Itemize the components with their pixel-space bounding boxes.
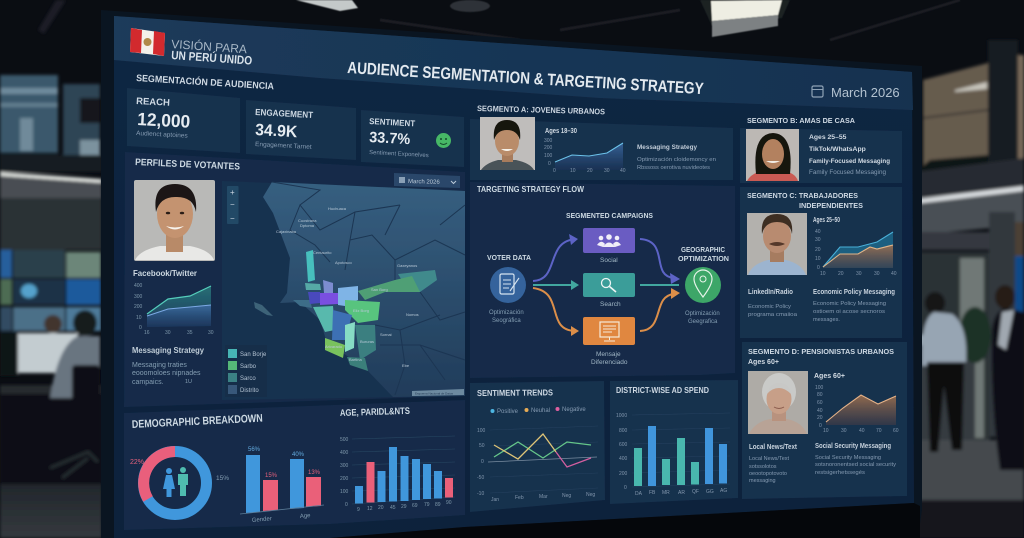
bar chart: [616, 413, 730, 497]
card: engagement: Engagement Tarnet: [255, 141, 312, 151]
card: mensaje diferenciado: Mensaje: [596, 351, 621, 358]
choropleth map: districts of Peru: Cajaxinaba: [276, 229, 297, 234]
chart: segment A ages: 10: [570, 168, 576, 174]
line chart: [477, 426, 598, 503]
choropleth map: districts of Peru: Cuostrana: [298, 218, 317, 223]
monitor lower bezel: [114, 503, 920, 538]
text block: Family-Focused Messaging: [809, 158, 890, 165]
chart: segment C: 20: [815, 247, 821, 253]
screen bezel: [101, 10, 922, 538]
text: social security messaging: [815, 443, 896, 476]
panel: demographic breakdown: [124, 400, 465, 530]
card: sentiment: 33.7%: [369, 129, 411, 148]
heading: SEGMENTO D: PENSIONISTAS URBANOS: [748, 347, 894, 356]
chart: segment D: 40: [817, 408, 823, 414]
heading: audience segmentation: SEGMENTACIÓN DE AUDIENCIA: [136, 72, 274, 92]
heading second line: INDEPENDIENTES: [799, 201, 863, 210]
chart: segment C: 10: [815, 256, 821, 262]
text: channel: programa cmaiioa: [748, 312, 798, 318]
choropleth map: districts of Peru: Dptoma: [300, 223, 315, 228]
node: geographic optimization: Optimización: [685, 311, 720, 317]
chart: facebook/twitter: [133, 268, 214, 336]
chart: segment C: 40: [815, 229, 821, 235]
bar chart: 1000: [616, 413, 627, 419]
heading: DISTRICT-WISE AD SPEND: [616, 385, 709, 395]
bar chart: gender and age: [240, 447, 324, 524]
logo text: VISIÓN PARA: [171, 36, 247, 56]
heading: ages: Ages 60+: [748, 359, 779, 366]
choropleth map: districts of Peru: San Borg: [371, 287, 388, 292]
logo text: UN PERÚ UNIDO: [171, 47, 253, 68]
text: social security messaging: Social Security Messaging: [815, 443, 891, 450]
title: AUDIENCE SEGMENTATION & TARGETING STRATEGY: [347, 59, 704, 98]
chart: segment D: 60: [893, 428, 899, 434]
line chart: 50: [479, 443, 485, 449]
bar chart: 400: [619, 456, 628, 462]
bar chart: age distribution: 12: [367, 506, 373, 512]
chart: segment D: [814, 373, 899, 434]
choropleth map: districts of Peru: Bartina: [349, 357, 362, 362]
heading: SEGMENTO B: AMAS DE CASA: [747, 116, 856, 125]
text: local news: sotssolotos: [749, 464, 777, 470]
choropleth map: districts of Peru: Gaxeyanos: [397, 263, 417, 268]
heading: age chart: AGE, PARIDL&NTS: [340, 406, 410, 419]
logo text: [171, 36, 253, 68]
map attribution: [412, 389, 464, 396]
line chart: Neg: [562, 493, 571, 499]
icon: woman and man: [163, 467, 188, 497]
choropleth map: districts of Peru: Sornai: [380, 332, 392, 337]
text: messaging strategy: Messaging traties: [132, 362, 187, 369]
text: economic policy messaging: messages.: [813, 317, 840, 323]
bar chart: gender and age: 15%: [265, 473, 278, 479]
arrow: mensaje to geographic: [640, 288, 680, 331]
text: social security messaging: Social Security Messaging: [815, 455, 881, 461]
dashboard screen: [114, 16, 914, 538]
card: reach: Audienct aptoines: [136, 130, 189, 140]
legend: Negative: [562, 407, 586, 413]
text: local news: [749, 444, 798, 484]
arrow: voter data to search: [533, 280, 579, 290]
legend: Neuhal: [531, 408, 550, 414]
card: engagement: 34.9K: [255, 121, 298, 141]
text: local news: oeootopotovoto: [749, 471, 787, 477]
bar chart: age distribution: [340, 436, 455, 513]
chart: segment C: 0: [817, 265, 820, 271]
bar chart: QF: [692, 489, 699, 495]
chart: facebook/twitter: 30: [208, 330, 214, 336]
panel: sentiment trends: [470, 381, 605, 512]
map legend: Sarbo: [240, 364, 257, 370]
bar chart: gender and age: 56%: [248, 447, 261, 453]
choropleth map: districts of Peru: Centaurito: [313, 250, 332, 255]
portrait: woman: [746, 129, 799, 181]
legend: Positive: [497, 409, 519, 415]
donut chart: [130, 452, 229, 514]
text: messaging strategy: eooomoloes nipnades: [132, 370, 201, 377]
heading: segment A: SEGMENTO A: JOVENES URBANOS: [477, 104, 606, 116]
map legend: Sarco: [240, 376, 256, 382]
card: engagement: [246, 100, 356, 160]
line chart: -50: [477, 475, 484, 481]
map legend: [225, 345, 267, 397]
text: local news: Local News/Text: [749, 444, 798, 451]
bar chart: MR: [662, 490, 670, 496]
chart: segment A ages: [544, 128, 626, 174]
card: sentiment: Sentiment Exponelves: [369, 150, 429, 159]
chart: segment D: 70: [876, 428, 882, 434]
chart: facebook/twitter: Facebook/Twitter: [133, 268, 198, 278]
chart: segment D: 20: [817, 415, 823, 421]
chart: segment A ages: 20: [587, 168, 593, 174]
card: mensaje diferenciado: Diferenciado: [591, 359, 628, 366]
line chart: 0: [481, 459, 484, 465]
bar chart: age distribution: 90: [446, 500, 452, 506]
text: channel: [748, 289, 798, 318]
text: messaging strategy: campaics.: [132, 379, 164, 386]
card: reach: REACH: [136, 96, 170, 109]
text: economic policy messaging: [813, 289, 895, 323]
map zoom controls: +: [230, 188, 235, 197]
bar chart: age distribution: 89: [435, 502, 441, 508]
chart: segment D: 30: [841, 428, 847, 434]
chart: facebook/twitter: 400: [134, 283, 143, 289]
chart: segment A ages: 0: [553, 168, 556, 174]
text block: Family Focused Messaging: [809, 169, 886, 176]
text: messaging strategy: [132, 345, 204, 386]
bar chart: age distribution: 45: [390, 505, 396, 511]
map zoom controls: [227, 186, 238, 224]
heading: flow: TARGETING STRATEGY FLOW: [477, 184, 585, 194]
bar chart: 600: [619, 442, 628, 448]
map legend: Distrito: [240, 388, 259, 394]
line chart: Neg: [586, 492, 595, 498]
text: messaging strategy: 1U: [185, 379, 192, 385]
line chart: Jan: [491, 497, 499, 503]
chart: segment C: [813, 217, 897, 277]
chart: segment A ages: 0: [548, 161, 551, 167]
card: engagement: ENGAGEMENT: [255, 107, 314, 120]
bar chart: 800: [619, 428, 628, 434]
background: right office scene: [915, 40, 1024, 538]
choropleth map: districts of Peru: Huchuaca: [328, 206, 347, 211]
panel: segment B: [740, 116, 902, 183]
bar chart: AG: [720, 488, 727, 494]
node: voter data: Optimización: [489, 310, 524, 316]
text: economic policy messaging: ostioem oi acose secnoros: [813, 309, 885, 315]
bar chart: age distribution: 200: [340, 476, 349, 482]
map zoom controls: −: [230, 200, 235, 209]
chart: segment D: 80: [817, 392, 823, 398]
donut chart: 22%: [130, 459, 144, 466]
chart: segment C: Ages 25–50: [813, 217, 840, 224]
card: search: Search: [600, 301, 621, 308]
card: search: [583, 273, 635, 308]
node: voter data: VOTER DATA: [487, 253, 532, 262]
choropleth map: districts of Peru: Nomos: [406, 312, 419, 317]
panel: segment D: [742, 342, 907, 499]
text: messaging strategy A: Rbssoss oerotiva nuvideotes: [637, 165, 710, 171]
bar chart: 0: [624, 485, 627, 491]
text: channel: Economic Policy: [748, 304, 791, 310]
panel: targeting strategy flow: [470, 182, 735, 378]
line chart: -10: [477, 491, 484, 497]
heading: perfiles de votantes: PERFILES DE VOTANTES: [135, 157, 240, 173]
chart: segment C: 30: [815, 237, 821, 243]
arrow: voter data to mensaje: [533, 288, 579, 336]
text: economic policy messaging: Economic Policy Messaging: [813, 289, 895, 296]
chart: segment A ages: Ages 18–30: [545, 128, 577, 135]
bar chart: GG: [706, 489, 714, 495]
node: geographic optimization: Geegrafica: [688, 319, 718, 325]
node: voter data: Seográfica: [492, 318, 521, 324]
bar chart: age distribution: 9: [357, 507, 360, 513]
bar chart: age distribution: 79: [424, 502, 430, 508]
bar chart: AR: [678, 490, 685, 496]
chart: segment D: 0: [819, 423, 822, 429]
portrait: young man: [134, 180, 215, 261]
card: reach: [127, 88, 240, 153]
choropleth map: districts of Peru: Arivarado: [325, 344, 343, 349]
bar chart: DA: [635, 491, 643, 497]
choropleth map: districts of Peru: [222, 173, 465, 400]
chart: facebook/twitter: 200: [134, 304, 143, 310]
node: geographic optimization: [678, 245, 729, 325]
line chart: Feb: [515, 495, 524, 501]
bar chart: age distribution: 100: [340, 489, 349, 495]
panel: segment A: [470, 104, 733, 180]
text: local news: Local News/Text: [749, 456, 790, 462]
node: geographic optimization: GEOGRAPHIC: [681, 245, 725, 254]
chart: segment D: 40: [859, 428, 865, 434]
map date dropdown: [394, 173, 460, 188]
text: social security messaging: restsigerhetssegés: [815, 470, 865, 476]
bar chart: 200: [619, 471, 628, 477]
line chart: 100: [477, 428, 486, 434]
text block: Ages 25–55: [809, 134, 847, 141]
portrait: young man A: [480, 117, 535, 170]
heading: SEGMENTO C: TRABAJADORES: [747, 191, 858, 200]
chart: segment D: Ages 60+: [814, 373, 845, 380]
panel: voter profiles: [124, 152, 465, 407]
chart: facebook/twitter: 10: [136, 315, 142, 321]
chart: facebook/twitter: 30: [165, 330, 171, 336]
bar chart: gender and age: 13%: [308, 470, 321, 476]
panel: segment C: [740, 187, 902, 338]
chart: segment C: 10: [820, 271, 826, 277]
arrow: search to geographic: [640, 284, 679, 286]
chart: segment C: 30: [874, 271, 880, 277]
text: social security messaging: sotsnoronentsed social security: [815, 462, 896, 468]
legend: [490, 407, 586, 415]
text: channel: LinkedIn/Radio: [748, 289, 793, 296]
map zoom controls: −: [230, 214, 235, 223]
icon: smiley: [436, 133, 451, 148]
heading: segmented campaigns: SEGMENTED CAMPAIGNS: [566, 211, 653, 220]
card: social: Social: [600, 257, 618, 264]
bar chart: age distribution: 300: [340, 463, 349, 469]
chart: facebook/twitter: 35: [187, 330, 193, 336]
text: messaging strategy A: Messaging Strategy: [637, 144, 697, 151]
chart: segment D: 10: [823, 428, 829, 434]
bar chart: age distribution: 69: [412, 503, 418, 509]
card: social: [583, 228, 635, 264]
chart: segment A ages: 100: [544, 153, 553, 159]
bar chart: gender and age: 40%: [292, 452, 305, 458]
portrait: man with moustache: [747, 213, 807, 275]
node: geographic optimization: OPTIMIZATION: [678, 254, 729, 263]
text: messaging strategy A: [637, 144, 716, 171]
card: reach: 12,000: [137, 109, 191, 132]
header band: [114, 16, 913, 110]
card: mensaje diferenciado: [583, 317, 635, 366]
panel: district-wise ad spend: [610, 380, 738, 504]
text: economic policy messaging: Economic Policy Messaging: [813, 301, 886, 307]
chart: facebook/twitter: 0: [139, 325, 142, 331]
chart: facebook/twitter: 300: [134, 294, 143, 300]
choropleth map: districts of Peru: Bururas: [360, 339, 374, 344]
chart: segment C: 40: [891, 271, 897, 277]
choropleth map: districts of Peru: Apotosco: [335, 260, 352, 265]
chart: segment A ages: 30: [604, 168, 610, 174]
text block: [809, 134, 890, 176]
choropleth map: districts of Peru: Eliz Borg: [353, 308, 369, 313]
bar chart: FB: [649, 490, 656, 496]
chart: segment C: 20: [838, 271, 844, 277]
chart: segment A ages: 300: [544, 138, 553, 144]
text: local news: messaging: [749, 478, 776, 484]
chart: segment D: 60: [817, 400, 823, 406]
donut chart: 15%: [216, 475, 229, 482]
date badge: March 2026: [831, 85, 900, 100]
map attribution: Esquema Nacional de Datos: [415, 392, 454, 396]
bar chart: age distribution: 0: [345, 502, 348, 508]
line chart: Mar: [539, 494, 548, 500]
node: voter data: [487, 253, 532, 324]
map legend: San Borje: [240, 352, 267, 358]
bar chart: age distribution: 500: [340, 437, 349, 443]
background: ceiling and lights: [296, 0, 960, 40]
bar chart: gender and age: Gender: [252, 516, 272, 524]
bar chart: age distribution: 20: [378, 505, 384, 511]
bar chart: age distribution: 400: [340, 450, 349, 456]
text block: TikTok/WhatsApp: [809, 146, 866, 153]
heading: SENTIMENT TRENDS: [477, 387, 553, 398]
chart: segment A ages: 200: [544, 145, 553, 151]
bar chart: age distribution: 29: [401, 504, 407, 510]
choropleth map: districts of Peru: Ebe: [402, 363, 410, 368]
logo: Peru flag: [130, 28, 165, 56]
arrow: social to geographic: [640, 239, 680, 284]
map date dropdown: March 2026: [408, 179, 440, 186]
text: messaging strategy: Messaging Strategy: [132, 345, 204, 355]
chart: segment C: 30: [856, 271, 862, 277]
heading: demographic breakdown: DEMOGRAPHIC BREAKDOWN: [132, 413, 263, 431]
chart: facebook/twitter: 16: [144, 330, 150, 336]
bar chart: gender and age: Age: [300, 513, 311, 520]
chart: segment A ages: 40: [620, 168, 626, 174]
card: sentiment: [361, 110, 464, 167]
arrow: voter data to social: [533, 234, 578, 281]
chart: segment D: 100: [815, 385, 824, 391]
text: messaging strategy A: Optimización cloidemoncy en: [637, 157, 716, 163]
portrait: older woman: [748, 371, 808, 434]
card: sentiment: SENTIMENT: [369, 116, 416, 128]
